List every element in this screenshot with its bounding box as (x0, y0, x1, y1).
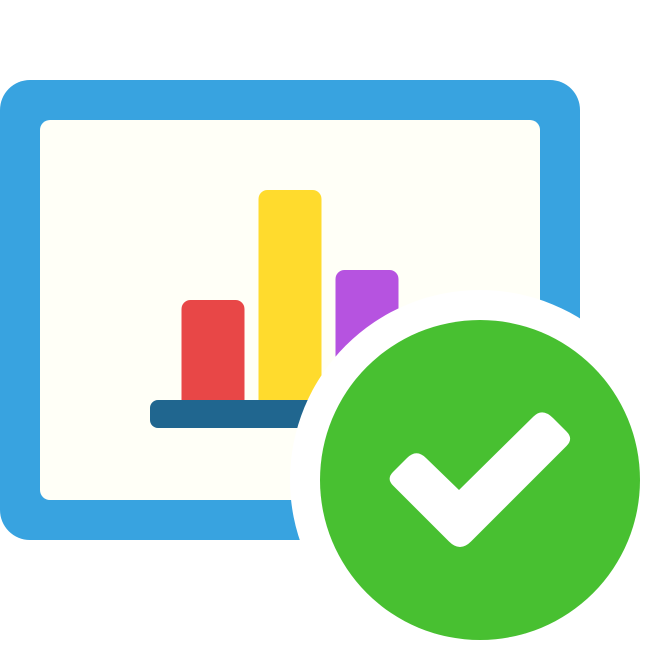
purple bar (336, 270, 398, 400)
icon: check mark (390, 412, 570, 547)
red bar (182, 300, 244, 400)
panel: cream screen (40, 120, 540, 500)
panel: blue screen frame (0, 80, 580, 540)
bar chart (150, 190, 430, 428)
badge: white outline (290, 290, 670, 670)
yellow bar (258, 190, 322, 400)
chart baseline (150, 400, 430, 428)
badge: green circle (320, 320, 640, 640)
